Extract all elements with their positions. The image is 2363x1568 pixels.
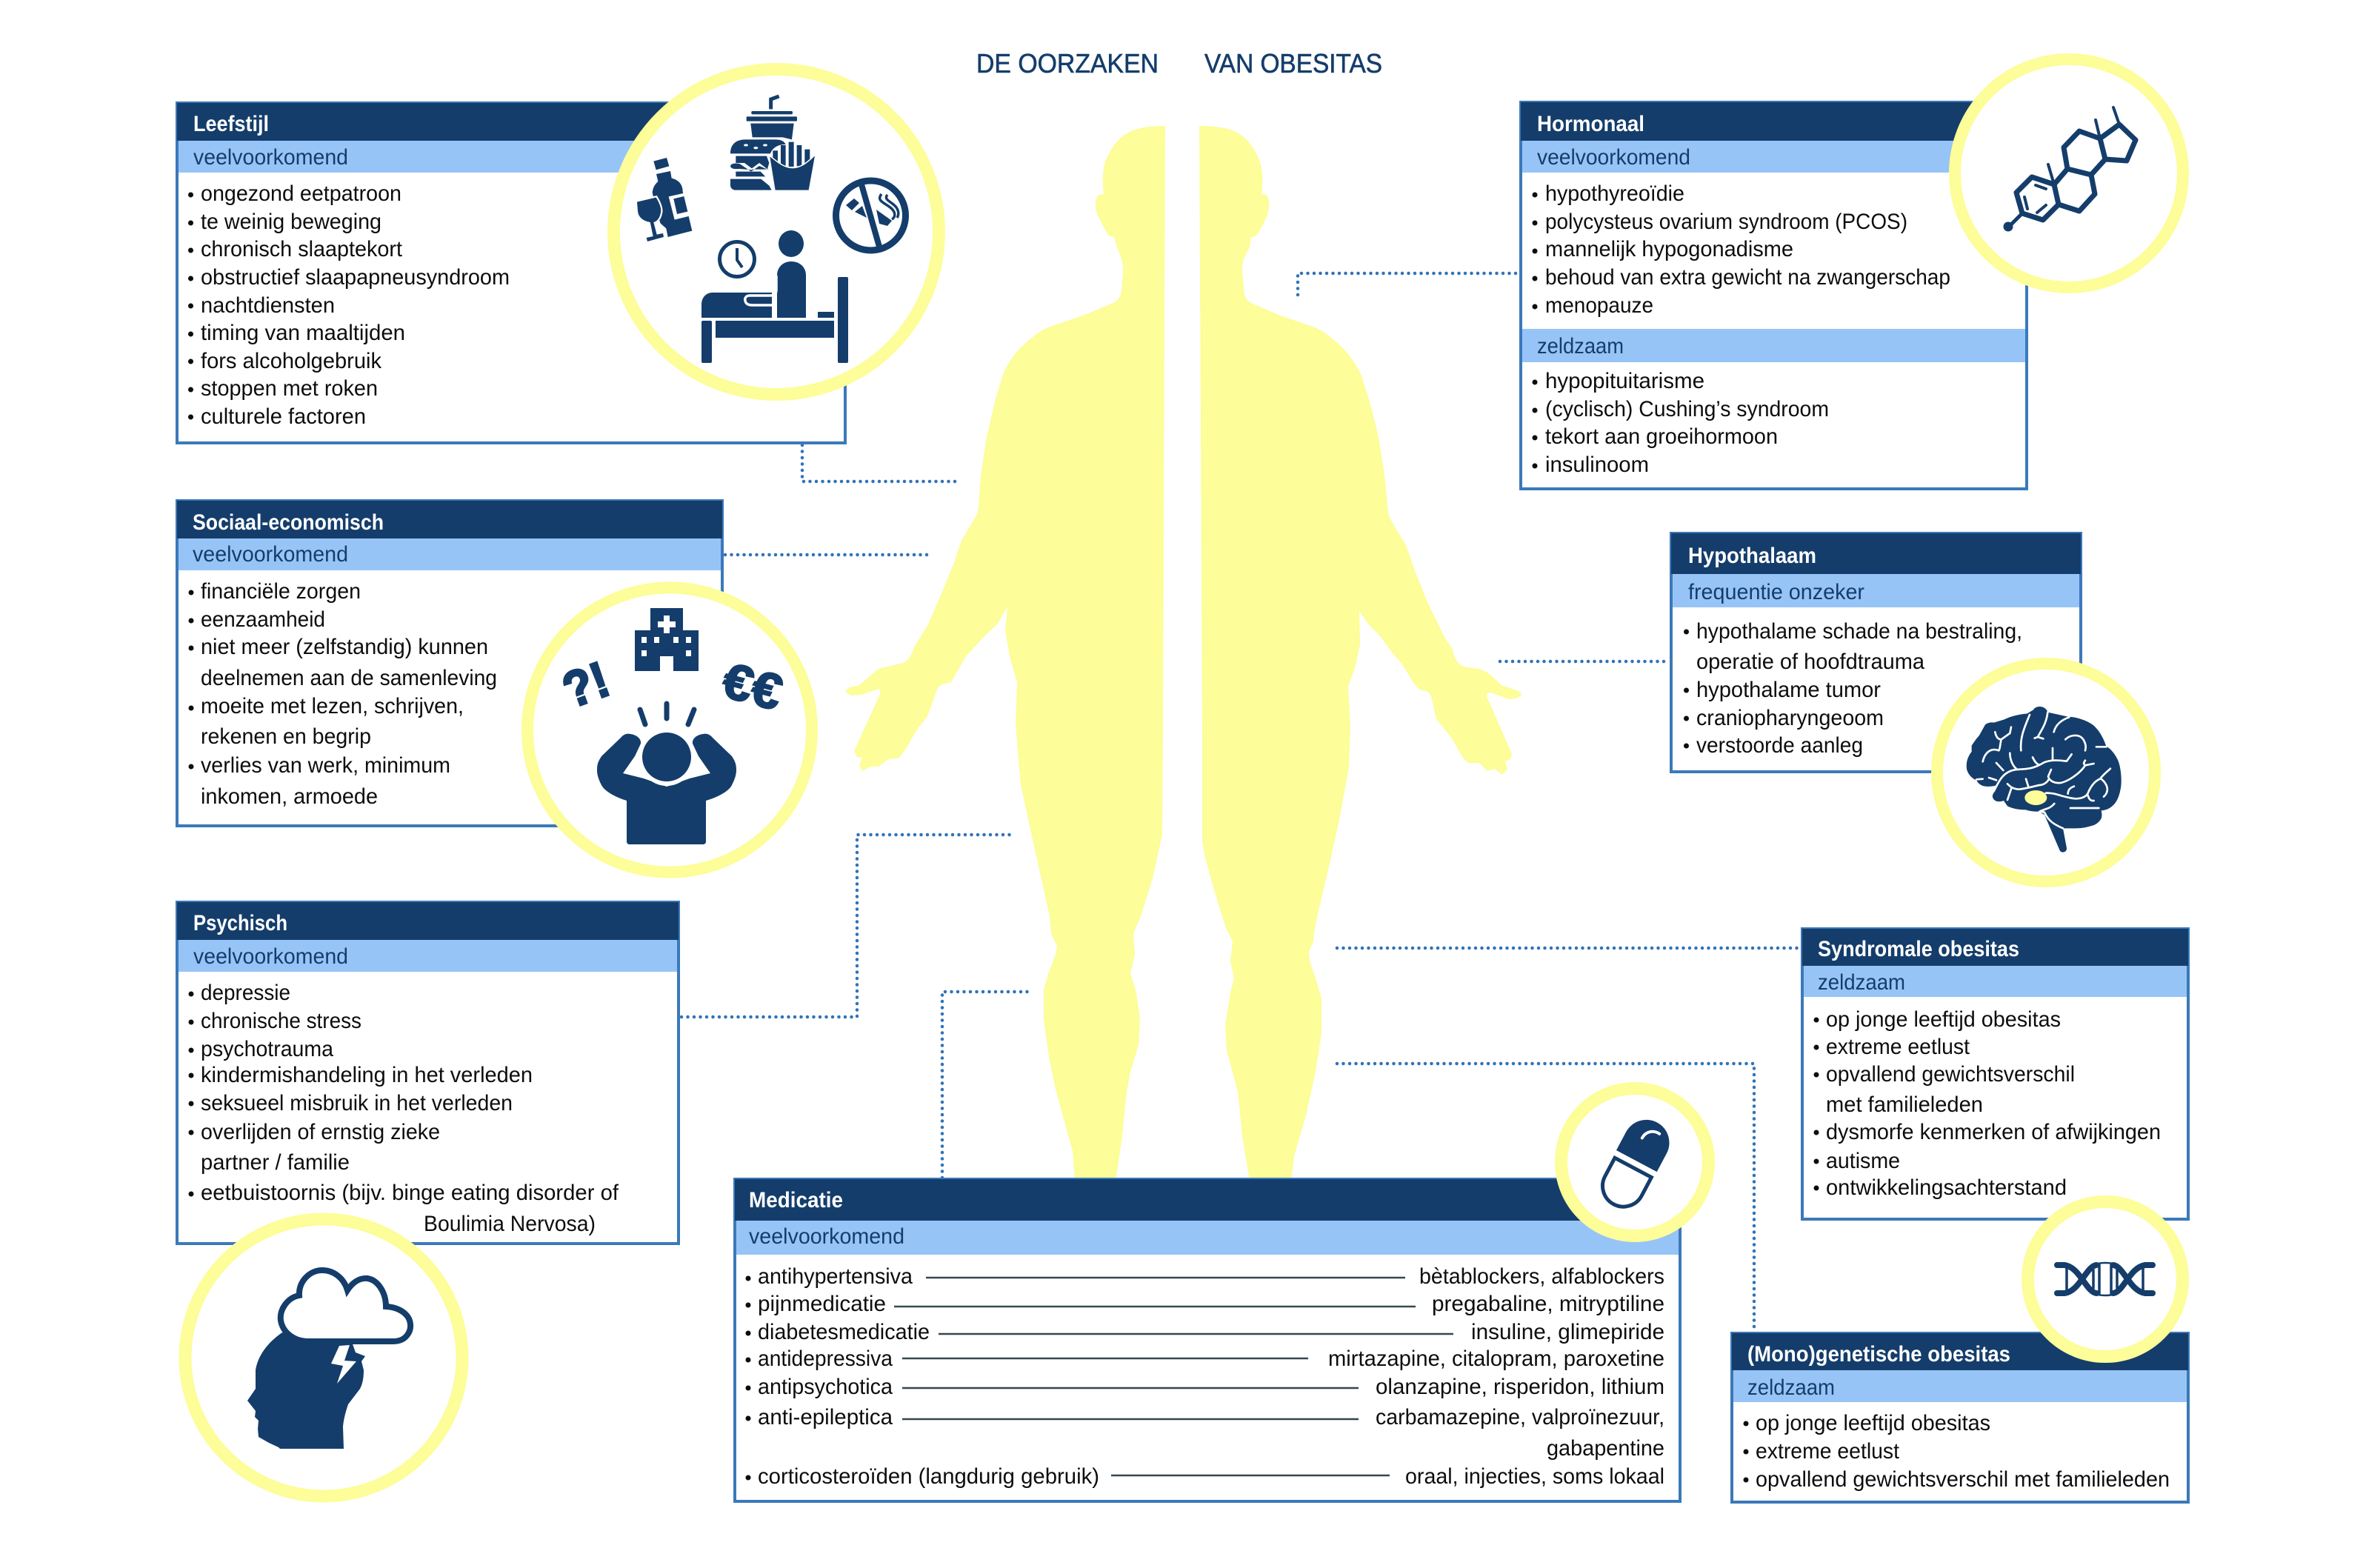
heading: Syndromale obesitas: Syndromale obesitas — [1818, 937, 2019, 961]
heading: Hypothalaam: Hypothalaam — [1688, 544, 1816, 568]
icon: clock — [720, 241, 754, 277]
panel: Leefstijl — [177, 103, 845, 443]
list: medicatie rows: corticosteroïden (langdurig gebruik) — [758, 1464, 1099, 1489]
heading: (Mono)genetische obesitas — [1732, 1333, 2188, 1370]
list: medicatie rows: diabetesmedicatie — [758, 1320, 930, 1344]
heading: Medicatie — [735, 1179, 1680, 1221]
list: medicatie rows: bètablockers, alfablockers — [1419, 1264, 1664, 1289]
list: syndromal features: ontwikkelingsachterstand — [1826, 1175, 2067, 1200]
list: psychische causes: depressie — [201, 981, 290, 1005]
list: monogenetic features: extreme eetlust — [1756, 1439, 1900, 1464]
list: psychische causes: overlijden of ernstig zieke — [201, 1120, 440, 1144]
list: leefstijl causes: fors alcoholgebruik — [201, 349, 382, 373]
list: common hormonal causes: mannelijk hypogonadisme — [1545, 237, 1793, 261]
list: leefstijl causes: timing van maaltijden — [201, 321, 405, 345]
connector: Medicatie to body — [942, 992, 1032, 1178]
heading: Sociaal-economisch: Sociaal-economisch — [193, 510, 384, 535]
list: rare hormonal causes: (cyclisch) Cushing’s syndroom — [1545, 397, 1829, 421]
list: hypothalamic causes: hypothalame tumor — [1696, 678, 1881, 702]
subheading: zeldzaam — [1522, 329, 2025, 362]
subheading: frequentie onzeker — [1673, 574, 2079, 607]
list: leefstijl causes — [188, 181, 510, 429]
connector: Psychisch to body — [681, 835, 1011, 1017]
subheading: frequentie onzeker: frequentie onzeker — [1688, 580, 1864, 604]
connector: Sociaal-economisch to body — [725, 553, 928, 556]
heading: Leefstijl — [177, 103, 845, 141]
list: medicatie rows: antidepressiva — [758, 1347, 893, 1371]
list: psychische causes: seksueel misbruik in het verleden — [201, 1091, 513, 1115]
list: syndromal features: met familieleden — [1826, 1092, 1983, 1117]
list: common hormonal causes — [1532, 181, 1950, 318]
icon: DNA helix — [2057, 1263, 2153, 1295]
icon: capsule — [1593, 1112, 1677, 1215]
list: leefstijl causes: obstructief slaapapneusyndroom — [201, 265, 510, 290]
connector: Monogenetische obesitas to body — [1337, 1064, 1754, 1331]
icon: head with storm cloud — [247, 1270, 410, 1449]
list: leefstijl causes: stoppen met roken — [201, 376, 378, 401]
list: rare hormonal causes: hypopituitarisme — [1545, 369, 1704, 393]
icon circle: psychological — [185, 1219, 462, 1496]
heading: Leefstijl: Leefstijl — [193, 112, 269, 136]
list: psychische causes: partner / familie — [201, 1150, 350, 1175]
subheading: veelvoorkomend: veelvoorkomend — [193, 145, 348, 170]
list: hypothalamic causes: operatie of hoofdtrauma — [1696, 650, 1924, 674]
panel: Medicatie — [735, 1179, 1680, 1501]
list: medicatie rows: olanzapine, risperidon, lithium — [1376, 1375, 1664, 1399]
list: medicatie rows: antipsychotica — [758, 1375, 893, 1399]
list: hypothalamic causes: hypothalame schade na bestraling, — [1696, 619, 2022, 644]
icon: stressed person — [597, 704, 736, 844]
icon circle: medication — [1562, 1089, 1708, 1235]
icon: person in bed — [701, 230, 848, 363]
title: DE OORZAKEN — [976, 48, 1159, 79]
list: medicatie rows — [745, 1264, 1664, 1489]
list: syndromal features: extreme eetlust — [1826, 1035, 1970, 1059]
icon circle: lifestyle — [613, 70, 939, 394]
list: monogenetic features: op jonge leeftijd obesitas — [1756, 1411, 1990, 1435]
icon: brain — [1967, 707, 2122, 853]
list: leefstijl causes: culturele factoren — [201, 404, 366, 429]
panel: Sociaal-economisch — [177, 501, 722, 826]
list: psychische causes: psychotrauma — [201, 1037, 333, 1061]
list: medicatie rows: gabapentine — [1547, 1436, 1664, 1461]
list: leefstijl causes: te weinig beweging — [201, 210, 381, 234]
list: syndromal features: op jonge leeftijd obesitas — [1826, 1007, 2061, 1032]
subheading: veelvoorkomend — [179, 538, 721, 570]
list: rare hormonal causes — [1532, 369, 1829, 477]
subheading: zeldzaam: zeldzaam — [1537, 334, 1624, 358]
panel: (Mono)genetische obesitas — [1732, 1333, 2188, 1502]
list: psychische causes: kindermishandeling in het verleden — [201, 1063, 533, 1087]
heading: Hormonaal — [1521, 102, 2027, 141]
icon: euro signs: €€ — [716, 652, 788, 721]
icon circle: genetics — [2028, 1201, 2182, 1357]
subheading: veelvoorkomend: veelvoorkomend — [193, 944, 348, 969]
list: common hormonal causes: hypothyreoïdie — [1545, 181, 1684, 206]
list: medicatie rows: pregabaline, mitryptiline — [1432, 1292, 1664, 1316]
list: sociaal-economische causes: moeite met lezen, schrijven, — [201, 694, 464, 718]
list: medicatie rows: oraal, injecties, soms lokaal — [1405, 1464, 1664, 1489]
icon: steroid molecule — [2003, 107, 2136, 231]
heading: Syndromale obesitas — [1802, 929, 2188, 966]
list: medicatie rows: carbamazepine, valproïnezuur, — [1376, 1405, 1664, 1429]
subheading: zeldzaam: zeldzaam — [1747, 1375, 1835, 1400]
list: rare hormonal causes: insulinoom — [1545, 453, 1649, 477]
list: common hormonal causes: menopauze — [1545, 293, 1653, 318]
icon: question and exclamation marks: ?! — [556, 651, 616, 719]
list: sociaal-economische causes: niet meer (zelfstandig) kunnen — [201, 635, 488, 659]
subheading: veelvoorkomend — [179, 940, 677, 972]
subheading: veelvoorkomend: veelvoorkomend — [1537, 145, 1690, 170]
list: medicatie rows: antihypertensiva — [758, 1264, 913, 1289]
list: leefstijl causes: ongezond eetpatroon — [201, 181, 401, 206]
connector: Leefstijl to body — [802, 445, 957, 481]
list: leefstijl causes: nachtdiensten — [201, 293, 335, 318]
list: sociaal-economische causes: verlies van werk, minimum — [201, 753, 450, 778]
list: hypothalamic causes — [1684, 619, 2022, 758]
list: syndromal features: autisme — [1826, 1149, 1900, 1173]
list: hypothalamic causes: verstoorde aanleg — [1696, 733, 1863, 758]
list: sociaal-economische causes: financiële zorgen — [201, 579, 361, 604]
list: sociaal-economische causes — [188, 579, 497, 809]
list: syndromal features: opvallend gewichtsverschil — [1826, 1062, 2075, 1087]
list: syndromal features: dysmorfe kenmerken of afwijkingen — [1826, 1120, 2161, 1144]
list: sociaal-economische causes: rekenen en begrip — [201, 724, 371, 749]
subheading: veelvoorkomend: veelvoorkomend — [749, 1224, 904, 1249]
list: sociaal-economische causes: deelnemen aan de samenleving — [201, 666, 497, 690]
list: psychische causes: Boulimia Nervosa) — [424, 1212, 596, 1236]
heading: Psychisch: Psychisch — [193, 911, 287, 935]
list: psychische causes: chronische stress — [201, 1009, 361, 1033]
heading: (Mono)genetische obesitas: (Mono)genetische obesitas — [1747, 1342, 2010, 1367]
list: medicatie rows: anti-epileptica — [758, 1405, 893, 1429]
list: sociaal-economische causes: inkomen, armoede — [201, 784, 378, 809]
panel: Syndromale obesitas — [1802, 929, 2188, 1219]
panel: Psychisch — [177, 902, 679, 1244]
list: monogenetic features: opvallend gewichtsverschil met familieleden — [1756, 1467, 2170, 1492]
list: hypothalamic causes: craniopharyngeoom — [1696, 706, 1884, 730]
subheading: veelvoorkomend — [1522, 141, 2025, 173]
panel: Hormonaal — [1521, 102, 2027, 489]
subheading: zeldzaam — [1733, 1370, 2187, 1402]
list: sociaal-economische causes: eenzaamheid — [201, 607, 325, 632]
list: common hormonal causes: behoud van extra gewicht na zwangerschap — [1545, 265, 1950, 290]
list: medicatie rows: pijnmedicatie — [758, 1292, 886, 1316]
icon: bottle and wine glass — [637, 158, 692, 241]
list: common hormonal causes: polycysteus ovarium syndroom (PCOS) — [1545, 210, 1907, 234]
icon: no smoking — [836, 179, 905, 252]
subheading: veelvoorkomend — [179, 141, 844, 173]
list: psychische causes: eetbuistoornis (bijv. binge eating disorder of — [201, 1181, 619, 1205]
body silhouette — [845, 126, 1522, 1181]
icon: fast food — [730, 96, 815, 190]
heading: Hormonaal: Hormonaal — [1537, 112, 1644, 136]
icon circle: hypothalamus — [1937, 664, 2155, 881]
connector: Hypothalaam to body — [1500, 660, 1669, 663]
icon: hospital — [635, 608, 699, 671]
title — [976, 48, 1382, 79]
heading: Psychisch — [177, 902, 679, 940]
list: leefstijl causes: chronisch slaaptekort — [201, 237, 403, 261]
subheading: veelvoorkomend — [736, 1221, 1679, 1255]
subheading: zeldzaam: zeldzaam — [1818, 970, 1905, 995]
list: monogenetic features — [1744, 1411, 2170, 1492]
heading: Medicatie: Medicatie — [749, 1188, 843, 1212]
heading: Hypothalaam — [1671, 533, 2081, 574]
title: VAN OBESITAS — [1204, 48, 1382, 79]
subheading: veelvoorkomend: veelvoorkomend — [193, 542, 348, 567]
connector: Hormonaal to body — [1298, 273, 1519, 295]
icon circle: hormones — [1955, 59, 2183, 287]
list: syndromal features — [1813, 1007, 2161, 1200]
connector: Syndromale obesitas to body — [1337, 947, 1800, 950]
list: psychische causes — [188, 981, 619, 1236]
list: medicatie rows: insuline, glimepiride — [1471, 1320, 1664, 1344]
subheading: zeldzaam — [1804, 966, 2187, 997]
list: rare hormonal causes: tekort aan groeihormoon — [1545, 424, 1778, 449]
heading: Sociaal-economisch — [177, 501, 722, 538]
panel: Hypothalaam — [1671, 533, 2081, 772]
list: medicatie rows: mirtazapine, citalopram, paroxetine — [1328, 1347, 1664, 1371]
icon circle: social and economic — [527, 588, 812, 873]
